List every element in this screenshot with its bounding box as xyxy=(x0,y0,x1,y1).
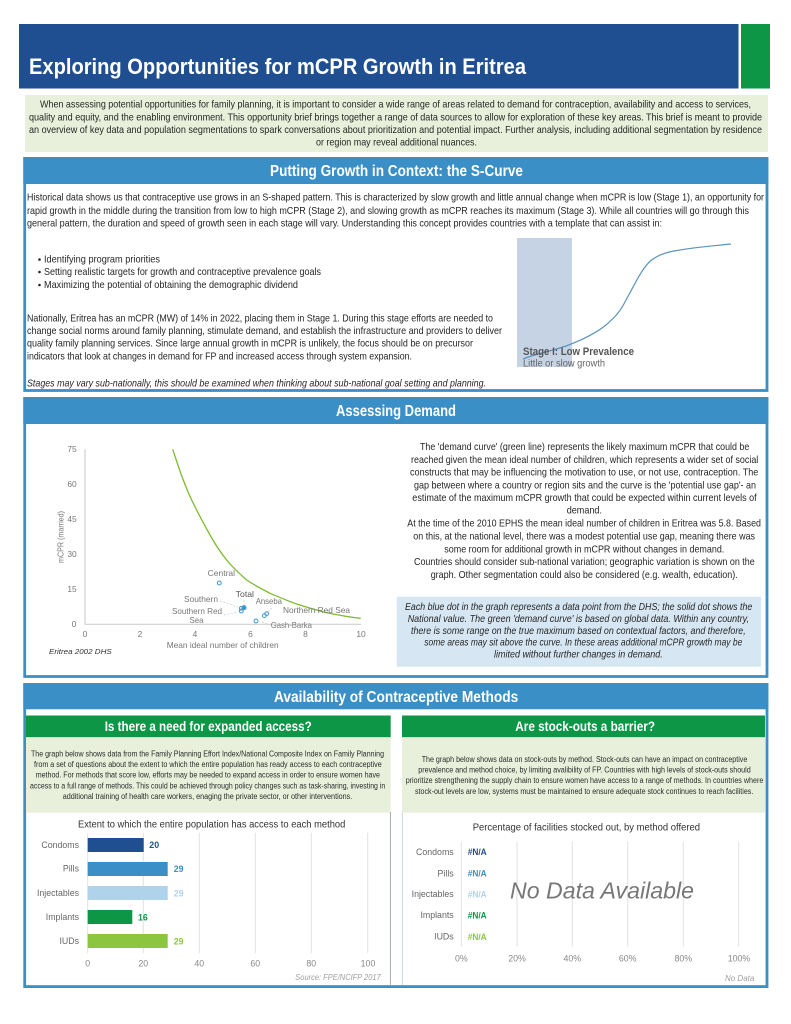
data point labels: Northern Red Sea xyxy=(283,605,350,615)
bar: IUDs: 29 xyxy=(174,936,184,946)
expanded access text: additional training of health care workers, enaging the private sector, or other interventions. xyxy=(63,792,352,801)
leader lines xyxy=(220,600,272,625)
x axis ticks: 20% xyxy=(508,954,526,964)
Eritrea stage paragraph: indicators that look at changes in demand for FP and increased access through system expansion. xyxy=(27,352,412,362)
x axis title: Mean ideal number of children xyxy=(167,640,279,650)
expanded access text: access to a full range of methods. This could be achieved through policy changes such as task-sharing, investing in xyxy=(30,781,385,790)
panel: S-curve xyxy=(23,157,768,390)
bar: condoms: 20 xyxy=(149,840,159,850)
bar: IUDs xyxy=(59,934,184,948)
demand curve chart xyxy=(49,444,366,656)
callout: blue dot note: limited without further changes in demand. xyxy=(494,650,663,661)
bar: condoms xyxy=(41,838,159,852)
x axis labels: 2 xyxy=(138,629,143,639)
intro text block: or region may reveal additional nuances. xyxy=(316,138,477,148)
y axis labels: 15 xyxy=(67,584,77,594)
title: Exploring Opportunities for mCPR Growth in Eritrea xyxy=(29,54,527,79)
bar: implants: Implants xyxy=(46,912,80,922)
demand curve explanation: graph. Other segmentation could also be considered (e.g. wealth, education). xyxy=(431,570,738,581)
bar: IUDs: IUDs xyxy=(59,936,80,946)
bar: pills: Pills xyxy=(63,864,80,874)
bar: implants: 16 xyxy=(138,912,148,922)
x axis ticks xyxy=(455,954,750,964)
heading: availability: Availability of Contraceptive Methods xyxy=(274,689,518,706)
callout: blue dot note: there is some range on the true maximum based on contextual factors, and therefore, xyxy=(411,626,746,637)
x axis labels: 8 xyxy=(303,629,308,639)
x axis labels: 0 xyxy=(83,629,88,639)
demand curve explanation: demand. xyxy=(567,506,602,516)
data point labels xyxy=(172,568,350,630)
chart: stock-outs by method xyxy=(412,822,755,983)
data point labels: Anseba xyxy=(256,596,282,606)
data point labels: Southern Red xyxy=(172,606,222,616)
data point labels: Sea xyxy=(190,615,204,625)
S-curve chart: Little or slow growth xyxy=(523,358,605,370)
source note: Source: FPE/NCIFP 2017 xyxy=(295,973,381,982)
stock-outs text: stock-out levels are low, systems must be maintained to ensure adequate stock continues to reach facilities. xyxy=(415,787,753,796)
heading: assessing demand: Assessing Demand xyxy=(336,403,456,420)
demand curve explanation: constructs that may be influencing the motivation to use, or not use, contraception. The xyxy=(410,468,759,478)
x axis ticks: 0 xyxy=(85,958,90,968)
demand curve explanation: gap between where a country or region sits and the curve is the 'potential use gap'- an xyxy=(414,480,756,491)
chart: access by method: Extent to which the entire population has access to each method xyxy=(78,820,345,831)
S-curve chart: Stage I: Low Prevalence xyxy=(523,346,634,358)
bullet list: Identifying program priorities xyxy=(44,254,160,266)
expanded access text: method. For methods that score low, efforts may be needed to expand access in order to ensure women have xyxy=(36,771,380,780)
intro text block xyxy=(25,95,768,152)
y axis labels xyxy=(67,444,77,629)
N/A values: #N/A xyxy=(468,890,487,900)
N/A values: #N/A xyxy=(468,932,487,942)
bullet list: Setting realistic targets for growth and contraceptive prevalence goals xyxy=(44,267,321,278)
category labels: IUDs xyxy=(434,932,454,942)
sub-panel: expanded access xyxy=(26,716,391,985)
category labels: Injectables xyxy=(412,889,454,899)
data points xyxy=(217,581,269,623)
demand curve explanation: estimate of the maximum mCPR growth that could be expected within current levels of xyxy=(412,493,757,504)
category labels xyxy=(412,847,454,942)
x axis ticks: 100 xyxy=(361,958,375,968)
sub-heading: expanded access: Is there a need for expanded access? xyxy=(105,719,312,734)
bar: pills: 29 xyxy=(174,864,184,874)
category labels: Implants xyxy=(420,910,454,920)
x axis ticks: 20 xyxy=(138,958,148,968)
no data source note: No Data xyxy=(725,974,755,983)
callout: blue dot note: National value. The green 'demand curve' is based on global data. Within any country, xyxy=(408,614,749,625)
S-curve intro paragraph xyxy=(27,192,765,230)
chart source: Eritrea 2002 DHS xyxy=(49,647,112,656)
category labels: Condoms xyxy=(416,847,454,857)
x axis ticks: 40% xyxy=(563,954,581,964)
demand curve line xyxy=(173,449,361,618)
expanded access text: from a set of questions about the extent to which the entire population has ready access to each contraceptive xyxy=(34,760,382,769)
bar: condoms: Condoms xyxy=(41,840,80,850)
bar: pills xyxy=(63,862,184,876)
x axis ticks: 60% xyxy=(619,954,637,964)
category labels: Pills xyxy=(438,868,454,878)
x axis ticks: 80 xyxy=(306,958,316,968)
expanded access text xyxy=(30,749,385,801)
y axis labels: 0 xyxy=(72,619,77,629)
N/A values: #N/A xyxy=(468,847,487,857)
demand curve explanation: some room for additional growth in mCPR without changes in demand. xyxy=(444,544,724,555)
Eritrea stage paragraph: quality family planning services. Since large annual growth in mCPR is unlikely, the focus should be on precursor xyxy=(27,338,474,350)
x axis ticks: 0% xyxy=(455,954,468,964)
x axis labels: 10 xyxy=(356,629,366,639)
header banner xyxy=(19,24,738,88)
x axis ticks: 100% xyxy=(728,954,750,964)
stock-outs text: prioritize strengthening the supply chain to ensure women have access to a range of methods. In countries where xyxy=(406,776,763,785)
S-curve intro paragraph: general pattern, the duration and speed of growth seen in each stage will vary. Understanding this concept provides countries with a template that can assist in: xyxy=(27,218,662,230)
panel: assessing demand xyxy=(23,397,768,676)
N/A values: #N/A xyxy=(468,868,487,878)
chart: access by method xyxy=(37,820,381,982)
x axis labels xyxy=(83,629,366,639)
stock-outs text: The graph below shows data on stock-outs by method. Stock-outs can have an impact on contraceptive xyxy=(422,755,747,764)
data point labels: Total xyxy=(236,589,254,599)
demand curve explanation xyxy=(407,442,761,581)
y axis title: mCPR (married) xyxy=(56,511,66,563)
x axis ticks: 80% xyxy=(674,954,692,964)
y axis labels: 60 xyxy=(67,479,77,489)
bullet list: Maximizing the potential of obtaining the demographic dividend xyxy=(44,280,298,291)
data point labels: Southern xyxy=(184,594,218,604)
demand curve explanation: The 'demand curve' (green line) represents the likely maximum mCPR that could be xyxy=(420,442,750,453)
stock-outs text: prevalence and method choice, by limiting avalibility of FP. Countries with high levels of stock-outs should xyxy=(418,765,751,774)
Eritrea stage paragraph: Nationally, Eritrea has an mCPR (MW) of 14% in 2022, placing them in Stage 1. During this stage efforts are needed to xyxy=(27,314,493,324)
sub-heading: stock-outs: Are stock-outs a barrier? xyxy=(515,719,655,734)
y axis labels: 45 xyxy=(67,514,77,524)
x axis ticks: 40 xyxy=(194,958,204,968)
y axis labels: 30 xyxy=(67,549,77,559)
bullet list xyxy=(38,254,321,291)
data point labels: Gash-Barka xyxy=(271,620,312,630)
x axis labels: 6 xyxy=(248,629,253,639)
demand curve explanation: Countries should consider sub-national variation; geographic variation is shown on the xyxy=(414,557,755,568)
heading: S-curve: Putting Growth in Context: the S-Curve xyxy=(270,163,523,180)
expanded access text: The graph below shows data from the Family Planning Effort Index/National Composite Index on Family Planning xyxy=(31,749,384,758)
sub-panel: stock-outs xyxy=(402,716,765,985)
S-curve chart xyxy=(517,238,731,370)
x axis ticks: 60 xyxy=(250,958,260,968)
bar: injectables xyxy=(37,886,184,900)
data point labels: Central xyxy=(208,568,235,578)
stock-outs text xyxy=(406,755,763,796)
bar: injectables: Injectables xyxy=(37,888,80,898)
N/A values xyxy=(468,847,487,942)
x axis labels: 4 xyxy=(193,629,198,639)
N/A values: #N/A xyxy=(468,910,487,920)
x axis ticks xyxy=(85,958,375,968)
no data overlay: No Data Available xyxy=(510,878,694,904)
y axis labels: 75 xyxy=(67,444,77,454)
callout: blue dot note xyxy=(397,597,761,667)
panel: availability of contraceptive methods xyxy=(23,683,768,987)
bar: injectables: 29 xyxy=(174,888,184,898)
Eritrea stage paragraph: change social norms around family planning, stimulate demand, and establish the infrastructure and providers to deliver xyxy=(27,326,503,337)
bar: implants xyxy=(46,910,148,924)
italic note: Stages may vary sub-nationally, this should be examined when thinking about sub-national goal setting and planning. xyxy=(27,378,486,390)
green header accent block xyxy=(741,24,770,88)
chart: stock-outs by method: Percentage of facilities stocked out, by method offered xyxy=(473,822,700,834)
Eritrea stage paragraph xyxy=(27,314,503,362)
